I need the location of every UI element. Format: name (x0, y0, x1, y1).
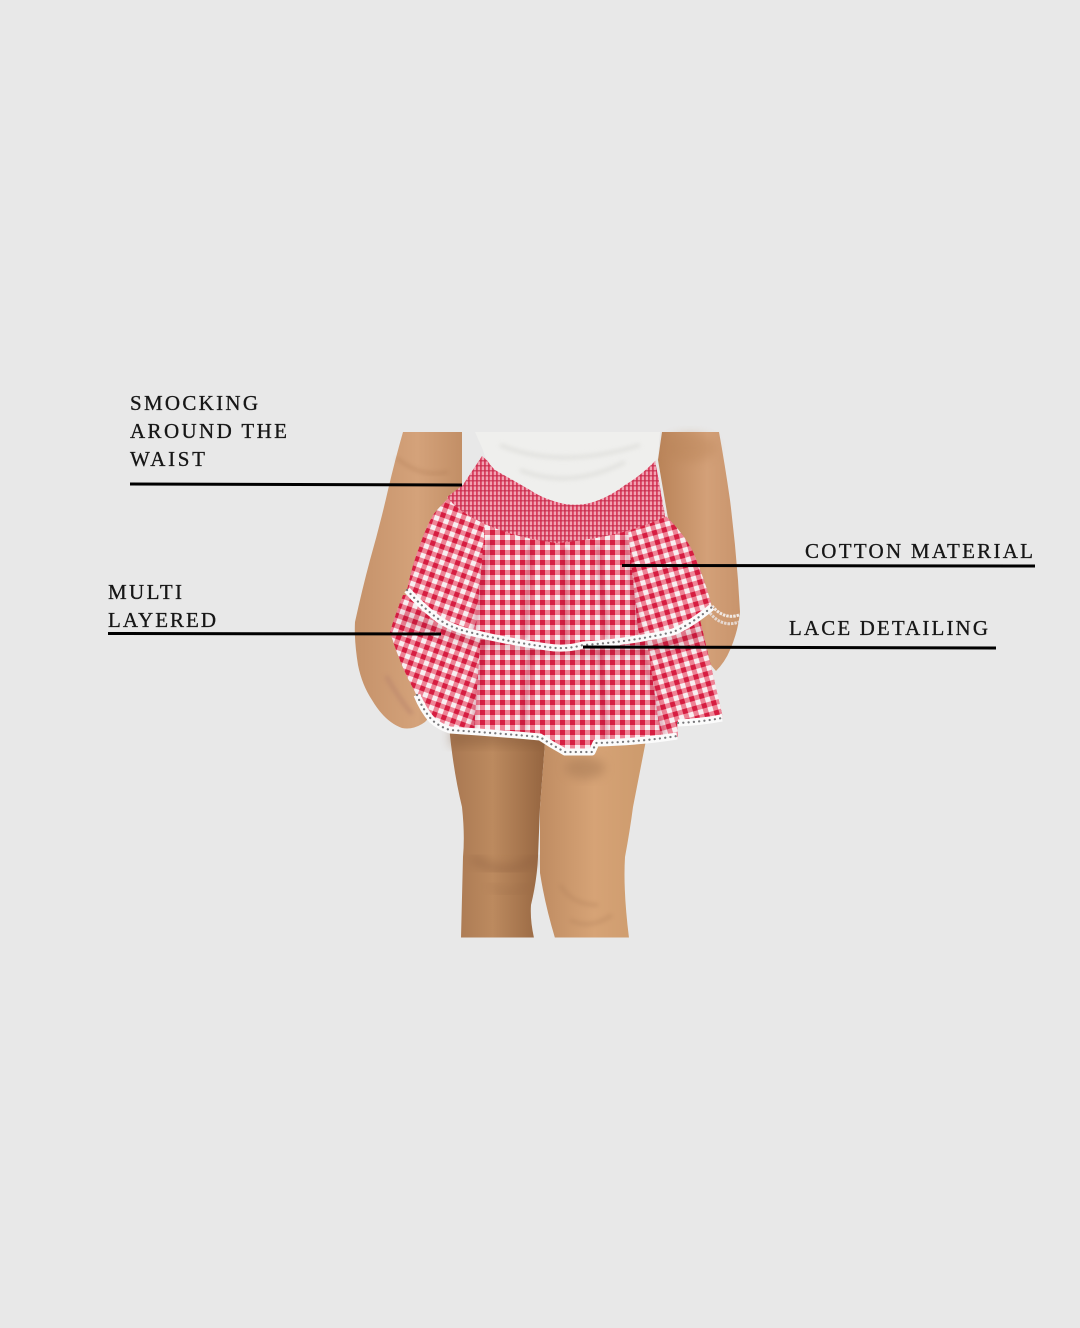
leader line: cotton material (622, 564, 1035, 568)
label: multi layered: LAYERED (108, 608, 216, 632)
lower skirt tier (390, 595, 723, 756)
infographic page (108, 396, 1035, 938)
leader line: smocking (130, 484, 462, 485)
left leg (449, 725, 546, 938)
label: multi layered (108, 580, 216, 632)
leader line: lace detailing (583, 647, 996, 648)
bracelet (710, 606, 739, 624)
right leg (540, 730, 648, 938)
lower lace trim (417, 695, 722, 752)
callout: multi layered (108, 580, 441, 634)
upper lace trim (407, 590, 712, 648)
label: smocking: SMOCKING (130, 391, 258, 415)
smocked waistband (447, 456, 665, 543)
label: multi layered: MULTI (108, 580, 182, 604)
label: cotton material: COTTON MATERIAL (805, 539, 1033, 563)
upper skirt tier (390, 456, 720, 655)
label: lace detailing: LACE DETAILING (789, 616, 988, 640)
callout: smocking around the waist (130, 391, 462, 485)
label: smocking (130, 391, 287, 471)
label: smocking: WAIST (130, 447, 205, 471)
label: smocking: AROUND THE (130, 419, 287, 443)
right arm and hand (658, 432, 740, 671)
leader line: multi layered (108, 632, 441, 636)
left arm and hand (355, 432, 480, 728)
model figure (355, 432, 740, 938)
white top (475, 432, 660, 505)
